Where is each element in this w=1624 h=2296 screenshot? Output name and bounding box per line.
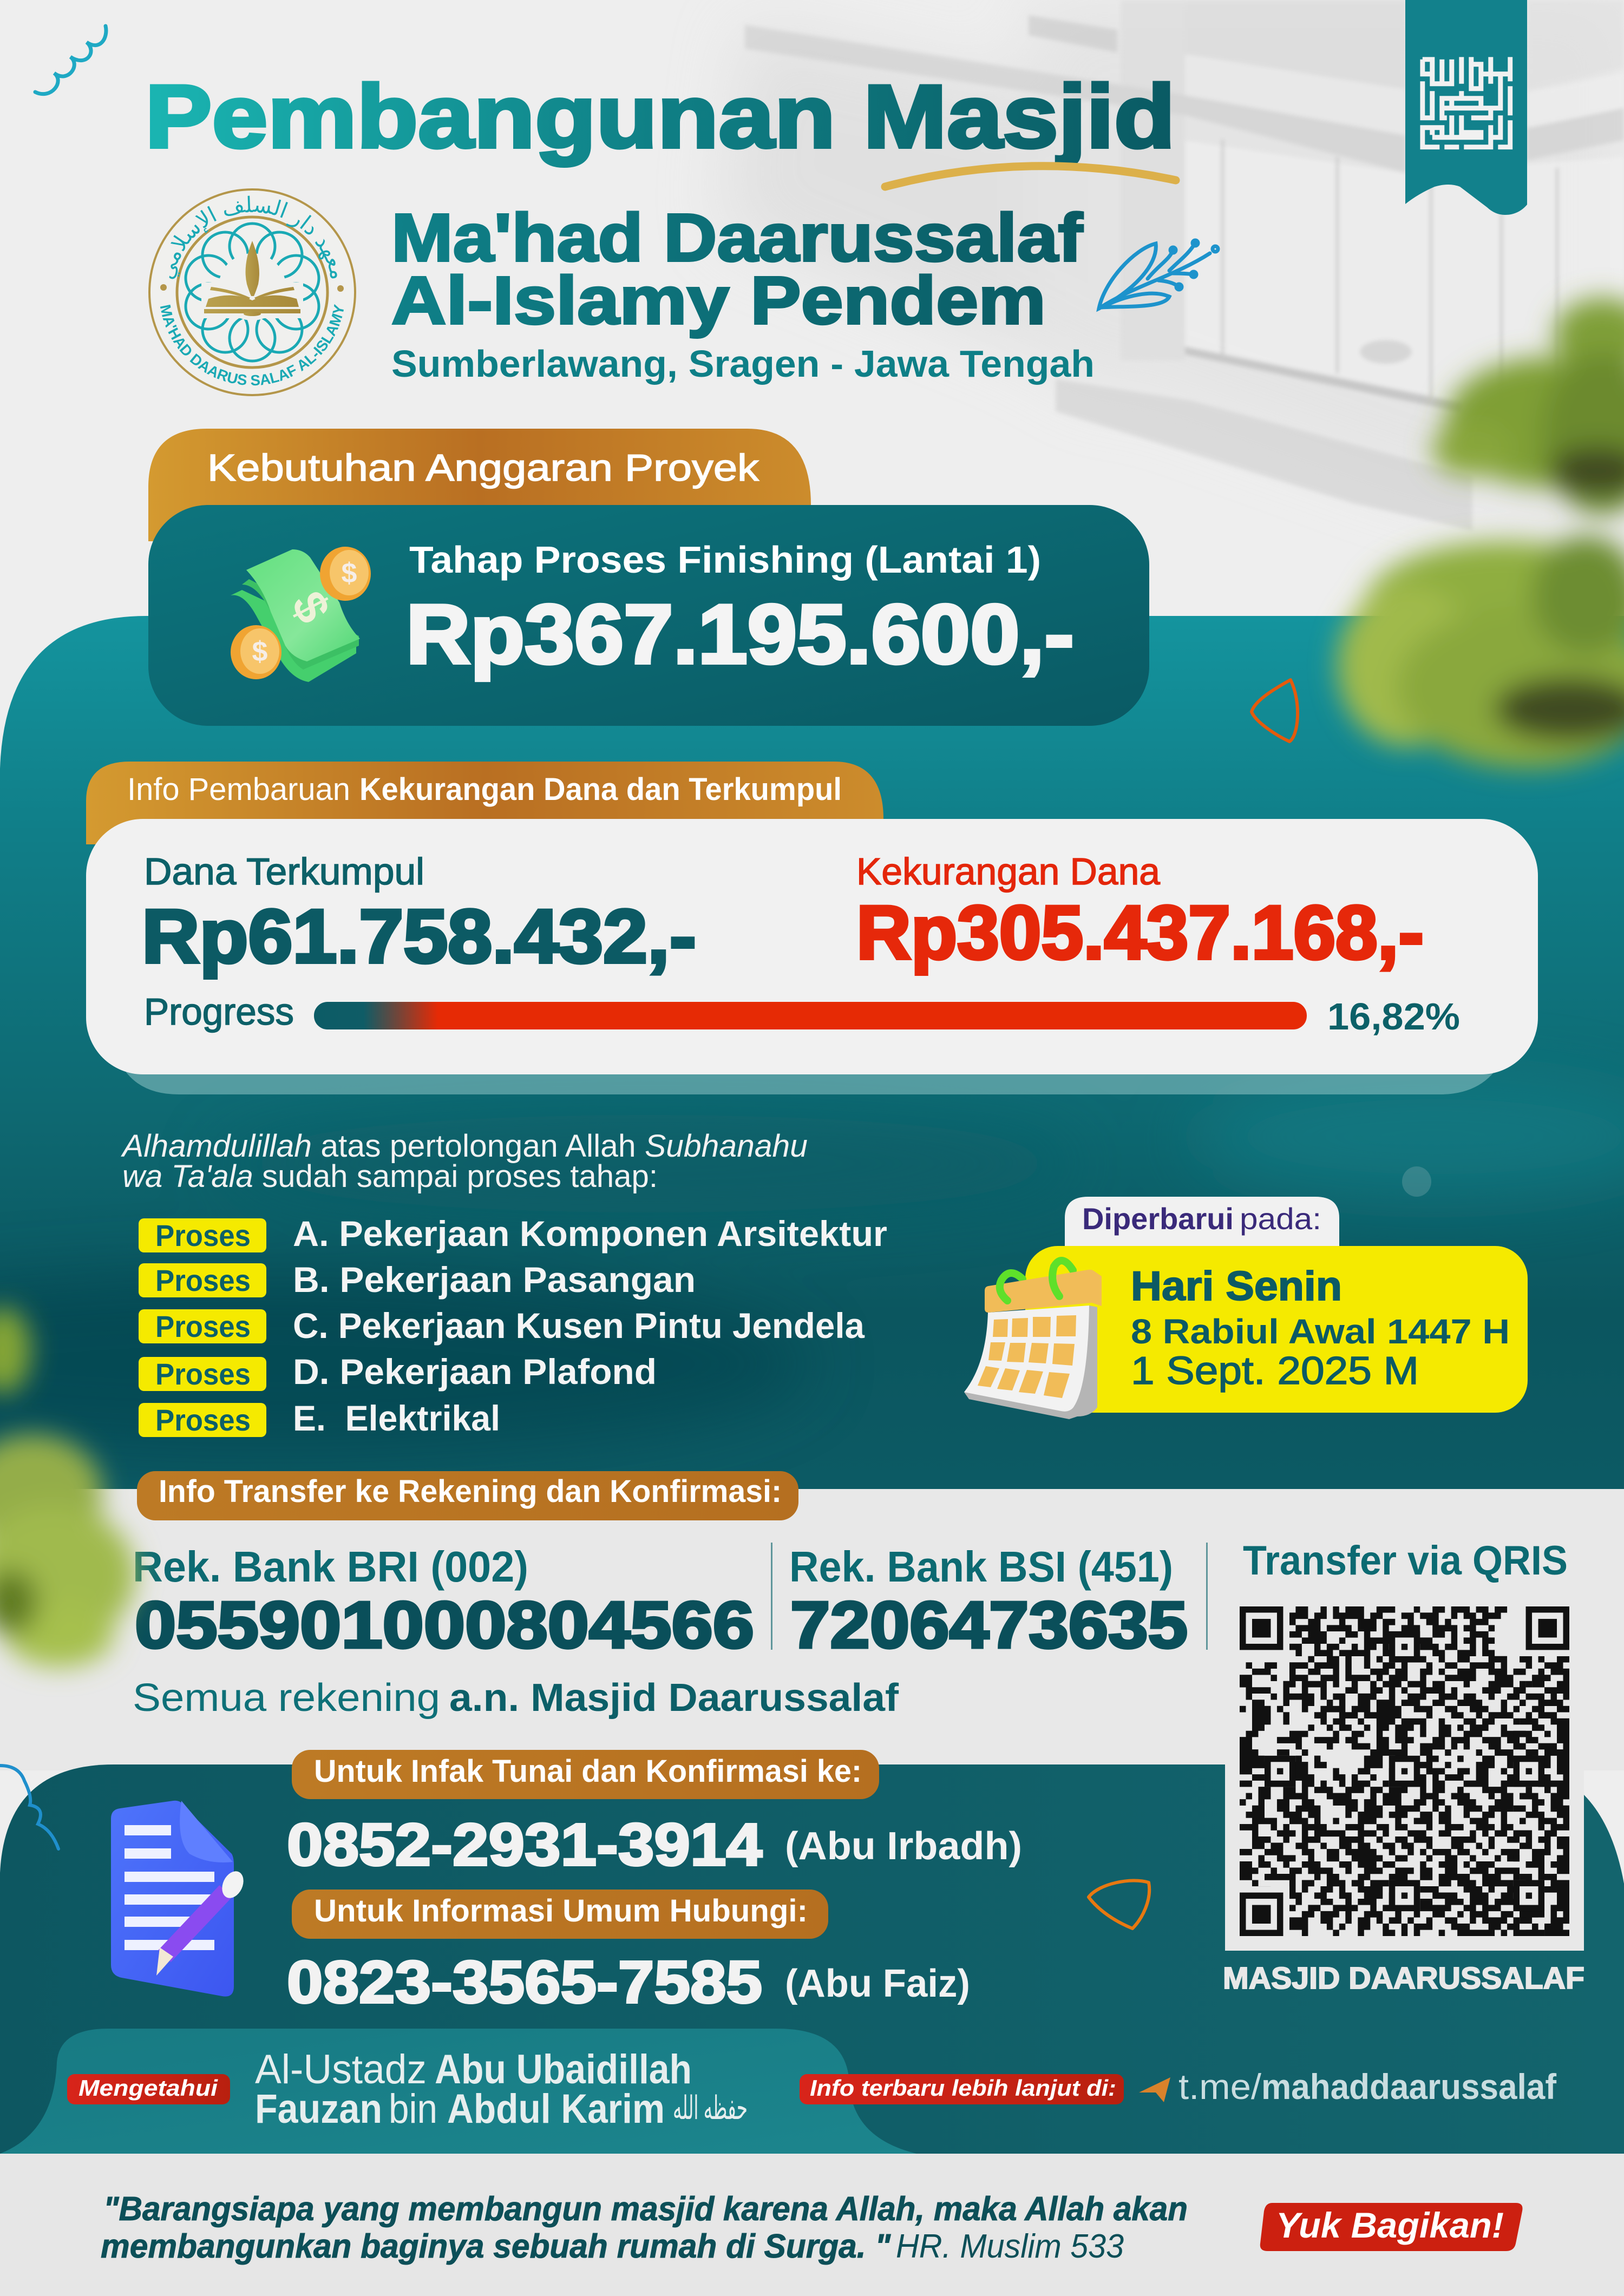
account holder: Semua rekening [133, 1676, 440, 1720]
scholar name line 2: Abdul Karim [447, 2086, 665, 2132]
funds header tab [86, 762, 883, 877]
budget header tab [148, 429, 811, 595]
progress percent: 16,82% [1327, 995, 1460, 1038]
QR right side modules [1514, 1659, 1569, 1933]
collected amount: Rp61.758.432,- [142, 894, 696, 979]
scholar name line 2: Fauzan [255, 2086, 382, 2132]
progress checklist [139, 1213, 887, 1438]
logo open book and wheat [204, 241, 300, 316]
infak pill: Untuk Infak Tunai dan Konfirmasi ke: [314, 1754, 862, 1789]
update yellow card [1025, 1246, 1528, 1413]
funds white card [86, 819, 1538, 1074]
hijri date: 8 Rabiul Awal 1447 H [1131, 1312, 1510, 1351]
telegram link: mahaddaarussalaf [1261, 2067, 1557, 2107]
mengetahui badge: Mengetahui [78, 2075, 218, 2101]
logo latin ring text: MA'HAD DAARUS SALAF AL-ISLAMY [160, 304, 344, 385]
infak pill [292, 1750, 879, 1799]
info phone: 0823-3565-7585 [287, 1949, 762, 2016]
icon: kufi calligraphy square [1420, 57, 1512, 149]
orange outline shape upper [1252, 680, 1298, 742]
decorative bubble [1402, 1166, 1431, 1197]
quote line 1: "Barangsiapa yang membangun masjid karena Allah, maka Allah akan [103, 2190, 1188, 2228]
scholar name line 2 [255, 2086, 665, 2132]
coin top [320, 547, 371, 601]
calendar rear ring parts [1001, 1261, 1073, 1280]
orange outline shape lower [1089, 1880, 1149, 1928]
update date card [964, 1197, 1528, 1419]
blurred foliage right [1337, 298, 1624, 769]
tag row E: Proses [155, 1403, 251, 1437]
item C: C. Pekerjaan Kusen Pintu Jendela [293, 1306, 865, 1346]
funds header label: Info Pembaruan [127, 772, 350, 807]
share label: Yuk Bagikan! [1276, 2205, 1504, 2245]
item B: B. Pekerjaan Pasangan [293, 1259, 696, 1300]
shortfall label: Kekurangan Dana [856, 850, 1160, 893]
location: Sumberlawang, Sragen - Jawa Tengah [391, 343, 1095, 385]
heading line 1: Ma'had Daarussalaf [391, 200, 1083, 275]
logo arabic ring text: معهد دار السلف الإسلامي [169, 196, 337, 279]
budget tab label: Kebutuhan Anggaran Proyek [207, 447, 759, 489]
channel info [800, 2067, 1557, 2107]
tag row C: Proses [155, 1309, 251, 1343]
coin top: $ [342, 557, 357, 589]
info pill: Untuk Informasi Umum Hubungi: [314, 1893, 808, 1928]
arabic honorific: حفظه الله [673, 2090, 748, 2126]
icon: calendar [964, 1261, 1102, 1419]
intro line 1: Alhamdulillah atas pertolongan Allah Subhanahu [121, 1129, 808, 1164]
bank accounts [133, 1538, 1568, 1720]
endorsement panel [0, 2029, 916, 2154]
info pill [292, 1890, 828, 1939]
update tab label: Diperbarui [1082, 1202, 1234, 1236]
BSI label: Rek. Bank BSI (451) [789, 1543, 1173, 1591]
progress label: Progress [144, 990, 294, 1033]
icon: money and coins [231, 547, 371, 682]
tag row B: Proses [155, 1263, 251, 1297]
background: faint teal scenery [0, 1077, 1624, 1456]
contact block [287, 1750, 1022, 2016]
intro text [121, 1129, 808, 1194]
lower light background [0, 1489, 1624, 1770]
icon: document with pencil [111, 1801, 247, 1997]
budget phase label: Tahap Proses Finishing (Lantai 1) [409, 539, 1041, 581]
budget panel [148, 505, 1149, 726]
transfer info pill [137, 1471, 798, 1520]
title underline swoosh [885, 166, 1176, 187]
icon: blue leaf sprig [1099, 240, 1218, 309]
title: Pembangunan Masjid [145, 67, 1175, 166]
collected label: Dana Terkumpul [144, 850, 424, 893]
BRI label: Rek. Bank BRI (002) [133, 1543, 528, 1591]
QR code [1240, 1606, 1569, 1936]
BSI account number: 7206473635 [790, 1588, 1188, 1662]
gregorian date: 1 Sept. 2025 M [1131, 1349, 1419, 1393]
budget amount: Rp367.195.600,- [406, 587, 1074, 681]
icon: money and coins: $ [281, 583, 341, 631]
BRI account number: 055901000804566 [135, 1588, 754, 1662]
scholar name line 1 [255, 2046, 692, 2092]
calendar front ring parts [1000, 1267, 1059, 1301]
background: building photo details [745, 0, 1624, 530]
heading line 2: Al-Islamy Pendem [391, 263, 1046, 338]
contact section background [0, 1764, 1624, 2154]
share badge [1260, 2203, 1522, 2251]
QR caption: MASJID DAARUSSALAF [1223, 1961, 1584, 1996]
blurred foliage left [0, 1307, 135, 1667]
day: Hari Senin [1131, 1263, 1342, 1309]
infak phone: 0852-2931-3914 [287, 1812, 762, 1878]
hadith quote [101, 2190, 1188, 2265]
item A: A. Pekerjaan Komponen Arsitektur [293, 1213, 887, 1254]
logo [149, 189, 355, 395]
decorative squiggle top left [35, 26, 106, 94]
funds panel shadow plate [119, 1028, 1502, 1094]
logo rosette [186, 224, 319, 361]
shortfall amount: Rp305.437.168,- [856, 890, 1424, 975]
infak contact name: (Abu Irbadh) [785, 1825, 1022, 1868]
intro line 2: wa Ta'ala sudah sampai proses tahap: [122, 1159, 658, 1194]
scholar name line 1: Al-Ustadz [255, 2046, 427, 2092]
quote line 2: membangunkan baginya sebuah rumah di Surga. " [101, 2228, 892, 2265]
QR panel [1223, 1606, 1584, 1996]
mengetahui badge [67, 2074, 230, 2104]
coin bottom: $ [252, 636, 268, 667]
tag row A: Proses [155, 1218, 251, 1252]
info contact name: (Abu Faiz) [785, 1962, 970, 2005]
account holder [133, 1676, 899, 1720]
scholar name line 2: bin [389, 2086, 437, 2132]
coin bottom [231, 625, 281, 679]
telegram link: t.me/ [1178, 2067, 1262, 2107]
blue squiggle lower left [0, 1766, 58, 1849]
update tab [1065, 1197, 1339, 1256]
update tab label: pada: [1240, 1202, 1321, 1236]
funds update panel [86, 762, 1538, 1094]
QRIS label: Transfer via QRIS [1243, 1538, 1568, 1584]
tag row D: Proses [155, 1357, 251, 1391]
ribbon with kufi emblem [1405, 0, 1527, 215]
item E: E. Elektrikal [293, 1398, 500, 1438]
funds header label: Kekurangan Dana dan Terkumpul [359, 772, 842, 807]
teal section background [0, 616, 1624, 1489]
transfer pill label: Info Transfer ke Rekening dan Konfirmasi: [159, 1474, 782, 1509]
logo side dots [160, 284, 344, 292]
background: building mass [722, 0, 1624, 541]
progress bar [314, 1002, 1307, 1029]
item D: D. Pekerjaan Plafond [293, 1352, 657, 1392]
heading: institute name [391, 200, 1095, 385]
footer light band [0, 2154, 1624, 2296]
update tab label [1082, 1202, 1321, 1236]
quote source: HR. Muslim 533 [896, 2228, 1124, 2265]
scholar name line 1: Abu Ubaidillah [435, 2046, 692, 2092]
channel badge: Info terbaru lebih lanjut di: [810, 2075, 1116, 2101]
account holder: a.n. Masjid Daarussalaf [449, 1676, 899, 1720]
icon: telegram plane [1139, 2077, 1170, 2102]
funds header label [127, 772, 842, 807]
